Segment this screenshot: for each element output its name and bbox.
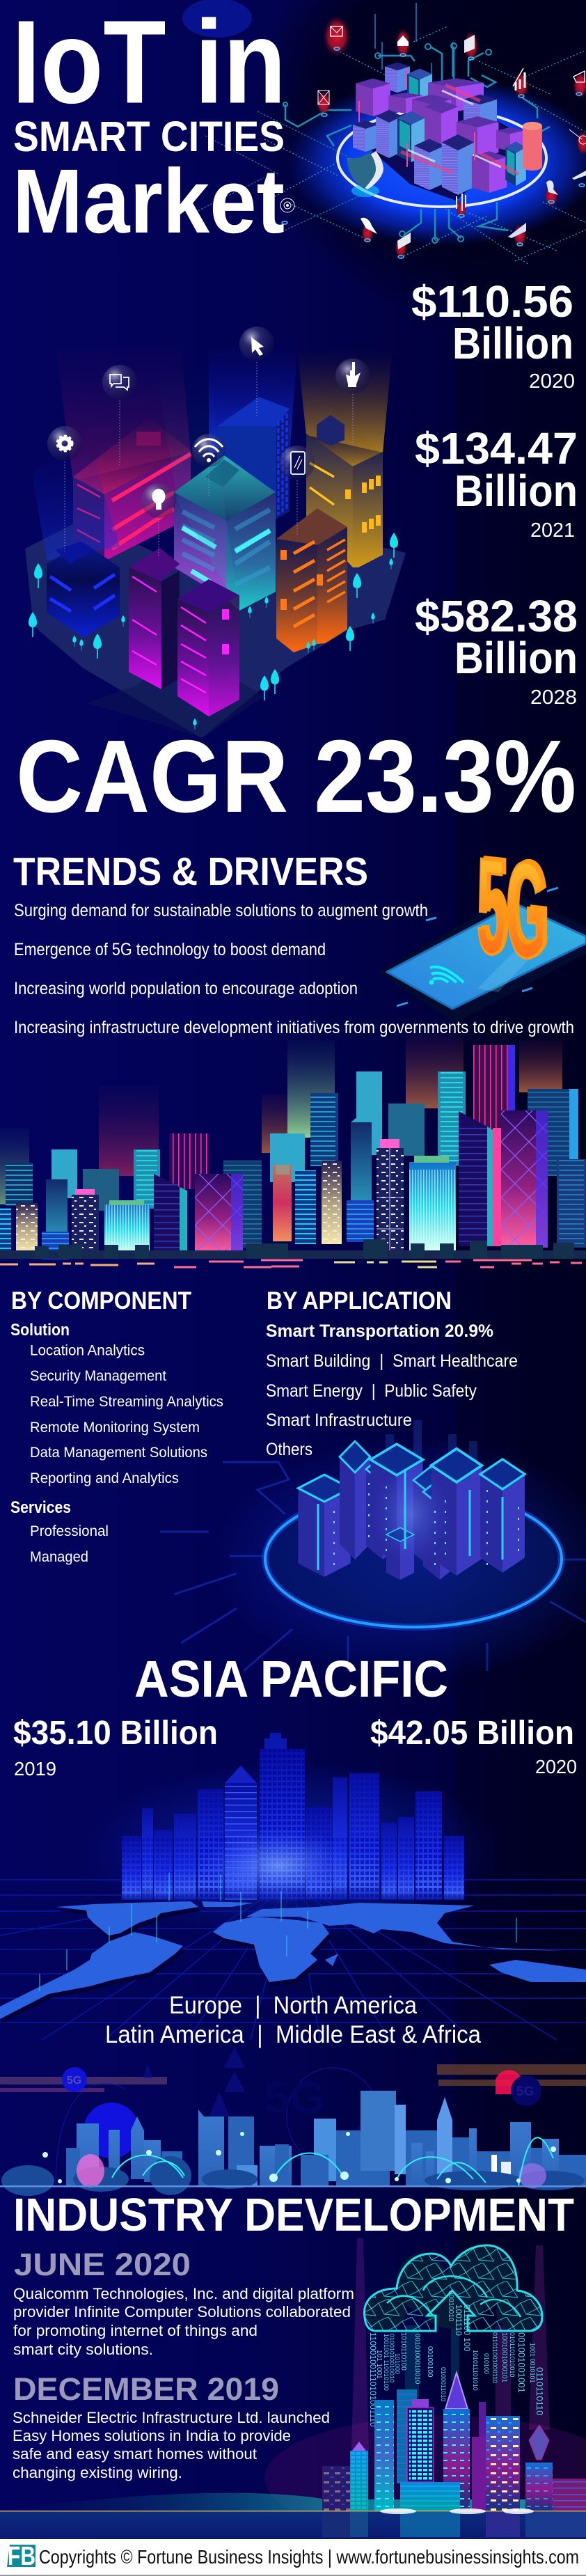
floating bubble icons (47, 327, 370, 518)
5G badges: 5G (67, 2075, 81, 2087)
binary data streams: 0010100010010 (413, 2334, 421, 2385)
illustration: glowing blue city on ring (160, 1420, 586, 1681)
by component section: Solution (10, 1321, 70, 1340)
december 2019 development: Schneider Electric Infrastructure Ltd. launched (13, 2409, 330, 2426)
market size 2020: Billion (452, 318, 573, 368)
binary data streams: 1001110 (454, 2304, 464, 2336)
market size 2028 (415, 591, 578, 709)
binary data streams: 101 1001 (375, 2350, 383, 2379)
pink building (73, 418, 191, 561)
small arrows (397, 888, 558, 1006)
5G badges: 5G (264, 2071, 326, 2123)
market size 2020: $110.56 (411, 276, 573, 327)
footer bar (0, 2539, 586, 2576)
june 2020 development: for promoting internet of things and (13, 2322, 258, 2339)
trends and drivers list: Increasing world population to encourage adoption (14, 979, 358, 998)
title: IoT in (12, 0, 286, 128)
binary data streams: 110001001110101001110 (368, 2332, 378, 2427)
market size 2021 (415, 423, 578, 542)
by component section: Remote Monitoring System (30, 1419, 200, 1436)
by application section: BY APPLICATION (267, 1287, 452, 1314)
by application section: Smart Transportation 20.9% (266, 1321, 493, 1341)
city towers (122, 1733, 464, 1904)
binary data streams: 0101101010010 (509, 2332, 516, 2377)
by component section: Services (10, 1498, 71, 1517)
cloud (364, 2245, 542, 2331)
water reflection (0, 2508, 586, 2539)
dark base under buildings (358, 91, 529, 201)
binary data streams: 001001001001 (516, 2332, 527, 2393)
binary data streams: 01001010010010 (388, 2334, 395, 2382)
neon towers (322, 2373, 586, 2511)
by component section (10, 1287, 223, 1565)
other regions: Europe | North America (169, 1992, 417, 2019)
illustration: neon skyline (0, 1035, 586, 1267)
june 2020 development (13, 2247, 354, 2358)
network icon pins (280, 15, 586, 259)
binary data streams: 0110110110 (534, 2367, 545, 2415)
binary data streams (368, 2291, 545, 2427)
december 2019 development: DECEMBER 2019 (13, 2371, 279, 2407)
5G badges: 5G (516, 2084, 534, 2099)
asia pacific heading: ASIA PACIFIC (134, 1650, 448, 1708)
5G badges (62, 2067, 541, 2123)
regional value 2019: $35.10 Billion (13, 1715, 218, 1752)
blue towers (66, 2091, 586, 2188)
regional value 2020: $42.05 Billion (370, 1715, 574, 1752)
binary data streams: 00010010 (447, 2291, 454, 2322)
binary data streams: 1001001000101 (500, 2332, 508, 2383)
title (12, 0, 286, 252)
blue back building (217, 397, 290, 519)
binary data streams: 0100011010 (440, 2367, 447, 2401)
binary data streams: 101000 (394, 2353, 401, 2374)
illustration: isometric neon city block (25, 327, 406, 738)
december 2019 development (13, 2371, 330, 2481)
by component section: Reporting and Analytics (30, 1470, 179, 1486)
by component section: Professional (30, 1523, 109, 1539)
title: Market (13, 150, 285, 252)
market size 2028: 2028 (530, 686, 577, 709)
regional value 2020: 2020 (535, 1756, 577, 1777)
trees (29, 533, 398, 730)
by component section: Real-Time Streaming Analytics (30, 1393, 223, 1410)
december 2019 development: safe and easy smart homes without (13, 2445, 257, 2463)
ground platform (25, 519, 406, 738)
by application section (266, 1287, 518, 1459)
illustration: isometric smart city hub (195, 0, 586, 320)
back light beams (56, 348, 191, 480)
market size 2021: $134.47 (415, 423, 578, 473)
market size 2020: 2020 (529, 370, 575, 393)
trends and drivers list (14, 901, 574, 1037)
ring under the city (338, 109, 546, 207)
market size 2028: $582.38 (415, 591, 578, 641)
by application section: Others (266, 1440, 312, 1459)
regional value 2019 (13, 1715, 218, 1780)
regional value 2020 (370, 1715, 577, 1777)
yellow building (306, 415, 383, 567)
by component section: Location Analytics (30, 1342, 145, 1359)
orange building (276, 508, 347, 652)
illustration: 5G smartphone (381, 829, 586, 1021)
footer logo: FB (8, 2542, 35, 2571)
binary data streams: 1001 0010101 (529, 2343, 536, 2383)
other regions (105, 1992, 481, 2048)
illustration: blue city on world map (0, 1733, 586, 2040)
by application section: Smart Building | Smart Healthcare (266, 1351, 518, 1371)
trends and drivers heading: TRENDS & DRIVERS (13, 849, 368, 894)
magenta towers (129, 548, 239, 716)
trends and drivers list: Emergence of 5G technology to boost demand (14, 940, 326, 959)
june 2020 development: Qualcomm Technologies, Inc. and digital platform (13, 2285, 354, 2302)
shrubs and base (1, 2156, 585, 2196)
binary data streams: 010100 (483, 2353, 490, 2374)
blue hexagon tower (32, 446, 120, 637)
by application section: Smart Energy | Public Safety (266, 1381, 477, 1401)
june 2020 development: smart city solutions. (13, 2341, 153, 2358)
december 2019 development: changing existing wiring. (13, 2464, 182, 2481)
binary data streams: 1001001 110010100 (383, 2334, 390, 2391)
pink cylinder tower (523, 122, 542, 171)
market size 2020 (411, 276, 575, 393)
cyan centre building (155, 362, 276, 611)
market size 2021: 2021 (530, 519, 575, 542)
top blue glow (182, 0, 252, 38)
dotted drop lines (65, 362, 353, 557)
binary data streams: 011011001000110 (491, 2332, 498, 2383)
trends and drivers list: Surging demand for sustainable solutions to augment growth (14, 901, 428, 920)
by component section: Managed (30, 1548, 88, 1565)
title: SMART CITIES (13, 113, 285, 160)
world map (2, 1906, 331, 2023)
illustration: blue skyline with network arcs (0, 2047, 586, 2196)
binary data streams: 1010110100 (399, 2332, 407, 2371)
other regions: Latin America | Middle East & Africa (105, 2021, 481, 2048)
by application section: Smart Infrastructure (266, 1411, 412, 1430)
binary data streams: 0111100 100 (462, 2304, 472, 2352)
december 2019 development: Easy Homes solutions in India to provide (13, 2427, 291, 2444)
by component section: BY COMPONENT (11, 1287, 191, 1314)
binary data streams: 101011101010 (472, 2350, 479, 2391)
binary data streams: 00100100 (426, 2346, 434, 2378)
isometric buildings (353, 62, 526, 195)
illustration: cloud and neon data city (0, 2238, 586, 2541)
june 2020 development: provider Infinite Computer Solutions collaborated (13, 2303, 351, 2320)
by component section: Security Management (30, 1367, 166, 1384)
june 2020 development: JUNE 2020 (14, 2247, 191, 2282)
shield (347, 151, 383, 197)
by component section: Data Management Solutions (30, 1444, 207, 1461)
regional value 2019: 2019 (14, 1758, 56, 1780)
